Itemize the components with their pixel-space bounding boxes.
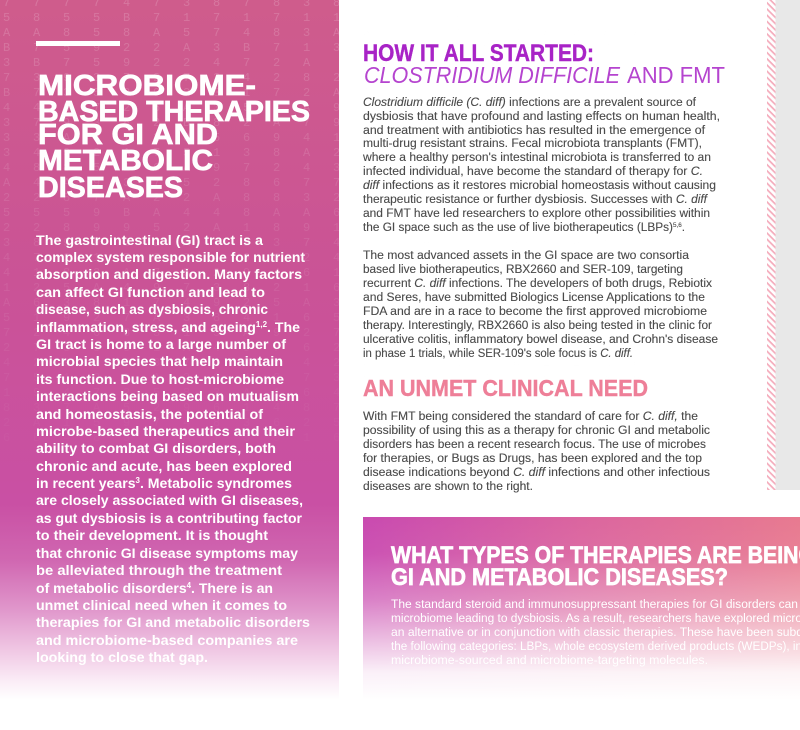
intro text block: can affect GI function and lead to (36, 285, 265, 301)
intro text block: disease, such as dysbiosis, chronic (36, 302, 268, 318)
text block: unmet clinical need: With FMT being considered the standard of care for C. diff, the (363, 409, 698, 423)
background digit pattern: 2 7 3 8 5 1 A 4 9 7 6 2 3 5 8 1 4 A 7 9 7 8 (3, 341, 648, 355)
text block: C. diff and FMT: multi-drug resistant strains. Fecal microbiota transplants (FMT), (363, 136, 702, 150)
background digit pattern: 5 8 5 5 B 7 1 7 1 7 1 1 5 8 7 8 5 9 (3, 11, 588, 25)
title: METABOLIC (38, 145, 213, 177)
intro text block: interactions being based on mutualism (36, 389, 299, 405)
text block: unmet clinical need: possibility of using this as a therapy for chronic GI and metabolic (363, 423, 710, 437)
text block: unmet clinical need: disease indications beyond C. diff infections and other infectious (363, 465, 710, 479)
title: MICROBIOME- (38, 70, 256, 102)
intro text block: inflammation, stress, and ageing (36, 320, 257, 336)
background digit pattern: 4 4 8 7 2 6 A 3 5 8 A 9 1 2 8 4 7 3 A 9 8 3 (3, 101, 648, 115)
heading: how it all started (363, 40, 725, 88)
text block: advanced assets: recurrent C. diff infections. The developers of both drugs, Rebiotix (363, 276, 712, 290)
background digit pattern: 3 B 7 5 9 2 2 4 7 2 A 2 8 8 8 A 8 B 3 (3, 56, 618, 70)
intro text block: in recent years (36, 476, 136, 492)
intro text block: that chronic GI disease symptoms may (36, 546, 298, 562)
text block: C. diff and FMT: and treatment with antibiotics has resulted in the emergence of (363, 123, 706, 137)
background digit pattern: 3 7 9 3 A 2 B 8 2 A 7 9 4 6 5 2 1 8 2 8 7 5 (3, 116, 648, 130)
title: FOR GI AND (38, 119, 218, 151)
intro text block: absorption and digestion. Many factors (36, 267, 302, 283)
background digit pattern: 3 4 9 2 A 7 5 1 3 8 A 2 6 7 3 8 3 9 7 7 9 9 (3, 146, 648, 160)
background digit pattern: 2 2 8 7 A 2 2 A 8 8 3 2 8 4 A 2 1 5 B 4 8 7 (3, 191, 648, 205)
intro text block: of metabolic disorders (36, 581, 188, 597)
background digit pattern: 3 3 A 4 7 2 8 5 6 9 4 1 3 2 3 2 5 7 8 2 9 3 (3, 131, 648, 145)
text block: C. diff and FMT: Clostridium difficile (C. diff) infections are a prevalent source of (363, 95, 697, 109)
intro text block: therapies for GI and metabolic disorders (36, 615, 310, 631)
background digit pattern: 7 3 9 3 7 2 7 3 4 2 8 2 2 7 4 9 A 8 B 9 8 4 (3, 71, 648, 85)
text block: advanced assets: ulcerative colitis, inflammatory bowel disease, and Crohn's disease (363, 332, 718, 346)
background digit pattern (3, 0, 678, 445)
background digit pattern: 5 1 9 2 7 A 3 8 4 1 6 5 2 9 7 A 3 4 8 1 2 8 (3, 311, 648, 325)
accent bar (36, 41, 120, 46)
text block: unmet clinical need: for therapies, or Bugs as Drugs, has been explored and the top (363, 451, 702, 465)
background digit pattern: 2 2 8 9 9 5 2 A 1 8 9 1 8 1 A 9 A 3 1 7 2 5 (3, 221, 648, 235)
intro text block: be alleviated through the treatment (36, 563, 282, 579)
text block: C. diff and FMT: . (682, 220, 685, 234)
intro text block: microbial species that help maintain (36, 354, 283, 370)
intro text block: unmet clinical need when it comes to (36, 598, 287, 614)
panel text: an alternative or in conjunction with classic therapies. These have been subd (391, 625, 800, 639)
panel text: The standard steroid and immunosuppressant therapies for GI disorders can (391, 597, 798, 611)
background digit pattern: 7 2 4 6 8 3 1 5 A 9 2 7 4 8 3 6 1 5 9 6 A 2 (3, 326, 648, 340)
background digit pattern: 4 8 8 5 1 6 A 9 7 2 4 3 8 2 1 7 B A 5 8 7 4 (3, 161, 648, 175)
heading: how it all started: CLOSTRIDIUM DIFFICILE (364, 62, 620, 88)
text block: advanced assets: FDA and are in a race to become the first approved microbiome (363, 304, 707, 318)
background digit pattern: A 4 A 9 3 7 5 2 8 6 7 7 9 1 5 8 4 B A 3 1 (3, 176, 648, 190)
text block: C. diff and FMT: and FMT have led researchers to explore other possibilities within (363, 206, 710, 220)
text block: C. diff and FMT (362, 95, 720, 234)
intro text block: . There is an (191, 581, 273, 597)
panel text: microbiome-sourced and microbiome-targeting molecules. (391, 653, 708, 667)
heading: an unmet clinical need: AN UNMET CLINICAL NEED (363, 375, 648, 401)
intro text block: 4 (187, 581, 192, 590)
intro text block: complex system responsible for nutrient (36, 250, 305, 266)
background digit pattern: 8 3 7 A 5 2 9 6 1 4 8 7 3 A 2 5 9 1 6 8 3 7 (3, 401, 648, 415)
intro text block: chronic and acute, has been explored (36, 459, 292, 475)
intro text block: The gastrointestinal (GI) tract is a (36, 233, 263, 249)
panel heading: GI AND METABOLIC DISEASES? (391, 564, 728, 591)
intro text block: to their development. It is thought (36, 528, 268, 544)
intro text block: are closely associated with GI diseases, (36, 493, 303, 509)
text block: advanced assets: The most advanced assets in the GI space are two consortia (363, 248, 689, 262)
background digit pattern: A A 8 5 8 A 5 7 4 8 3 A 8 7 A 7 5 3 5 9 7 (3, 26, 678, 40)
intro text block: and microbiome-based companies are (36, 633, 298, 649)
background digit pattern: 4 1 8 3 A 7 5 2 9 4 6 1 8 3 2 7 5 A 9 8 8 1 (3, 266, 648, 280)
intro text block: 1,2 (256, 320, 268, 329)
background digit pattern: B 7 5 9 2 2 A 3 B 7 1 3 8 2 8 5 A A 5 8 (3, 41, 618, 55)
background digit pattern: 5 5 5 9 B A 4 4 8 A A 6 5 1 4 5 A 7 8 2 4 (3, 206, 648, 220)
heading: how it all started: HOW IT ALL STARTED: (363, 40, 594, 67)
intro text block (36, 233, 310, 666)
intro text block: as gut dysbiosis is a contributing factor (36, 511, 302, 527)
background digit pattern: 2 A 1 5 9 7 4 8 3 6 2 5 A 7 1 9 4 3 8 2 6 5 (3, 416, 648, 430)
hatched divider and grey side panel (767, 0, 800, 490)
intro text block: microbe-based therapeutics and their (36, 424, 295, 440)
text block: advanced assets: in phase 1 trials, while SER-109's sole focus is C. diff. (363, 346, 633, 360)
text block: C. diff and FMT: where a healthy person's intestinal microbiota is transferred to an (362, 150, 711, 164)
intro text block: . The (267, 320, 300, 336)
intro text block: looking to close that gap. (36, 650, 208, 666)
text block: unmet clinical need: diseases are shown to the right. (363, 479, 533, 493)
text block: C. diff and FMT: 5,6 (673, 222, 682, 229)
intro text block: GI tract is home to a large number of (36, 337, 286, 353)
text block: C. diff and FMT: diff infections as it restores microbial homeostasis without causing (363, 178, 716, 192)
intro text block: and homeostasis, the potential of (36, 407, 263, 423)
panel: what types of therapies (363, 517, 800, 701)
title: BASED THERAPIES (38, 96, 310, 128)
background digit pattern: 1 2 5 A 4 9 7 3 8 2 1 6 4 5 9 3 7 8 2 A 4 5 (3, 281, 648, 295)
panel heading (390, 546, 800, 586)
background digit pattern: 4 2 9 A 6 3 7 1 8 5 4 2 9 3 7 A 6 8 1 2 A 8 (3, 356, 648, 370)
text block: unmet clinical need (363, 409, 710, 493)
text block: unmet clinical need: disorders has been a recent research focus. The use of microbes (363, 437, 706, 451)
background digit pattern: 6 B 4 8 3 2 A 7 5 9 1 6 3 8 4 2 7 A 5 9 1 3 (3, 431, 648, 445)
intro text block: its function. Due to host-microbiome (36, 372, 284, 388)
text block: C. diff and FMT: the GI space such as the use of live biotherapeutics (LBPs) (363, 220, 683, 234)
panel text (391, 597, 800, 667)
background digit pattern: 7 5 1 3 8 A 2 9 4 6 7 3 5 1 8 2 A 4 9 7 8 B (3, 371, 648, 385)
background digit pattern: 1 9 4 7 2 5 8 3 A 1 6 4 9 2 7 5 3 8 A 1 4 6 (3, 386, 648, 400)
text block: advanced assets (363, 248, 718, 360)
intro text block: 3 (136, 476, 141, 485)
background digit pattern: 4 7 2 1 5 8 3 A 9 6 2 4 7 8 1 3 A 5 8 9 2 7 (3, 251, 648, 265)
text block: C. diff and FMT: dysbiosis that have profound and lasting effects on human health, (363, 109, 720, 123)
title: DISEASES (38, 172, 183, 204)
text block: C. diff and FMT: therapeutic resistance or further dysbiosis. Successes with C. diff (363, 192, 709, 206)
heading: how it all started: AND FMT (627, 62, 725, 88)
panel text: microbiome leading to dysbiosis. As a result, researchers have explored micro (391, 611, 800, 625)
background digit pattern: B 7 3 5 8 9 2 3 1 7 2 A 8 4 3 7 1 9 1 5 5 2 (3, 86, 648, 100)
text block: advanced assets: based live biotherapeutics, RBX2660 and SER-109, targeting (363, 262, 683, 276)
text block: C. diff and FMT: infected individual, have become the standard of therapy for C. (363, 164, 703, 178)
background digit pattern: 3 8 9 9 5 2 A 4 9 3 7 4 8 A 6 2 1 7 5 8 A 4 (3, 236, 648, 250)
background digit pattern: A 6 3 8 1 7 4 9 2 5 A 3 8 1 6 7 2 4 9 3 5 8 (3, 296, 648, 310)
text block: advanced assets: therapy. Interestingly, RBX2660 is also being tested in the clinic for (363, 318, 712, 332)
title (38, 70, 310, 204)
intro text block: . Metabolic syndromes (140, 476, 292, 492)
intro text block: ability to combat GI disorders, both (36, 441, 276, 457)
text block: advanced assets: and Seres, have submitted Biologics License Applications to the (363, 290, 705, 304)
